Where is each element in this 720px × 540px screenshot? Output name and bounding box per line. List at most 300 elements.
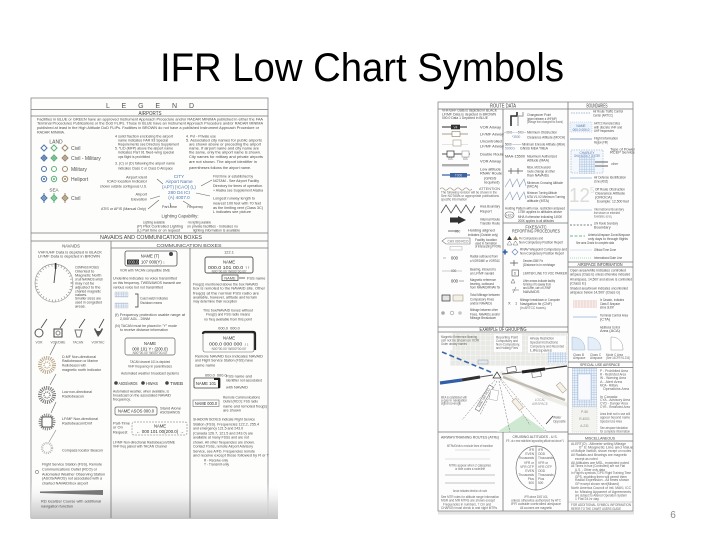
- airspace symbol: class shading: [573, 297, 629, 333]
- route symbol: uncontrolled airway: [442, 138, 504, 148]
- miscellaneous text: In Flight's symbols, GPS Flight Training Time: [571, 471, 631, 475]
- arrow: internal transfer route: [450, 216, 500, 226]
- panel: legend right page: [438, 102, 636, 511]
- panel: cruising altitudes: VFR OTP: [538, 465, 552, 469]
- icon: lifter arrows: [511, 278, 555, 294]
- airports intro text: published at least in the High Altitude DoD FLIPs. Facilities in BROWN do not have a published Instrument Approach Procedure or: [37, 125, 260, 130]
- heading: communication boxes: COMMUNICATION BOXES: [156, 243, 222, 248]
- route symbol: MEA: 5000 ——— Minimum Enroute Altitude (MEA): [505, 142, 566, 146]
- airport data block: 280 D4 ICI: [168, 190, 190, 195]
- route symbol: minimum turning altitude: [505, 190, 565, 203]
- airspace symbol: class shading: Additional Control: [600, 324, 620, 330]
- map: example of grouping: signal coverage: [441, 402, 461, 406]
- heading: position reporting procedures: [512, 224, 560, 234]
- special use airspace symbols and text: Special Use Area: [600, 420, 622, 424]
- heading: position reporting procedures: REPORTING PROCEDURES: [512, 228, 560, 234]
- communication box: remote communications outlet: name and remoted freq(s): [223, 404, 268, 408]
- note: underline indicates no voice: on this frequency. TWEB/AWOS transmit are: [113, 280, 181, 285]
- special use airspace symbols and text: R - Restricted Area: [600, 372, 626, 376]
- note: underline indicates no voice: various voice but not transmitted: [113, 284, 163, 290]
- note: frequency protection: (N) TACAN must be placed in "Y" mode: [115, 323, 177, 328]
- route symbol: radial outbound: 000: [451, 256, 459, 260]
- communication box: TACAN: VHF frequency in parentheses: [128, 364, 172, 368]
- airspace symbol: class shading: Terminal Control Area: [600, 312, 629, 318]
- map: example of grouping: a gap in navigation: [441, 398, 467, 402]
- airport data block: Part-time: [162, 204, 177, 209]
- heading: miscellaneous: MISCELLANEOUS: [585, 436, 615, 440]
- airspace symbol: class shading: Area (ACA): [600, 328, 621, 333]
- communication box: remote communications outlet: Remote Communications: [223, 394, 260, 400]
- miscellaneous text: to: Missing Apparent of Agreements: [575, 490, 631, 494]
- communication box: part-time or on request: NAME: [154, 424, 166, 428]
- route symbol: MAA: Altitude (MAA): [527, 158, 550, 162]
- boundary line symbols: Official Time Zone: [594, 247, 616, 252]
- off route obstruction clearance altitude: Off Route Obstruction: [595, 186, 625, 192]
- airport data block: NOTAM - See Airport Facility: [213, 178, 259, 183]
- note: shadow boxes: T - Transmit-only: [204, 462, 229, 466]
- icon: mileage breakdown: (in ARTCC boxes): [520, 306, 546, 310]
- compass roses note: charted magnetic: [75, 288, 101, 294]
- automated weather broadcast systems: ASOS/AWOS: [118, 381, 138, 386]
- airport notes column two: [186, 134, 263, 170]
- note: shadow boxes: and emergency 121.5 and 243.0: [193, 426, 244, 430]
- special use airspace symbols and text: In Canada:: [600, 395, 618, 399]
- communication box: part-time or on request: LF/MF Non-directional Radiobeacon/DME: [113, 440, 175, 444]
- miscellaneous text: U.S. - Other only data: [575, 468, 605, 472]
- heading: navaids and communication boxes: NAVAIDS AND COMMUNICATION BOXES: [100, 235, 203, 241]
- communication box: FSS not associated: identifier not associated: [226, 378, 262, 382]
- route symbol: zigzag area boundary: Report: [480, 208, 493, 214]
- route symbol: magnetic reference bearing: [451, 277, 500, 290]
- route symbol: RNAV route: T000: [455, 173, 462, 177]
- lighting capability: (L) Part time or on request: [137, 228, 181, 232]
- map: example of grouping: Compulsory and Recorded: [530, 344, 564, 348]
- compass roses note: Magnetic North: [75, 272, 101, 278]
- route symbol: holding pattern: 200K applies to all altitudes: [518, 218, 554, 223]
- airport data block: Longest runway length to: [213, 196, 255, 200]
- communication box: shadowed remote NAVAID: 000.0 000 000 ↓↓: [209, 342, 249, 346]
- route data color note: [442, 108, 497, 120]
- boundary line symbols: only days to through flights: [588, 236, 628, 241]
- map: example of grouping: AIRSPACE: [532, 402, 548, 406]
- map: example of grouping: cell not be shown on VOR: [441, 338, 480, 342]
- navaid data color note: LF/MF Data is depicted in BROWN: [38, 254, 100, 258]
- off route obstruction clearance altitude: Clearance Altitude: [595, 190, 625, 196]
- route symbol: total mileage boxes: Total Mileage between: [470, 292, 500, 297]
- panel: cruising altitudes: Plus: [538, 477, 545, 481]
- miscellaneous text: [568, 442, 633, 511]
- route symbol: MOCA: Clearance Altitude (MOCA): [527, 134, 566, 140]
- airport data block: First time or established by: [213, 174, 253, 178]
- map: example of grouping: Airway Restriction: [530, 336, 554, 340]
- panel: cruising altitudes: VFR or: [524, 461, 535, 465]
- compass roses note: used in congested: [75, 300, 102, 304]
- panel: airway training routes: Frequencies in numbers, 7 Cm and: [443, 502, 491, 506]
- boundary line symbols: Boundary: [594, 224, 611, 230]
- airport notes column two: are not shown. The airport identifier in: [189, 159, 257, 164]
- route symbol: changeover point: (given between a VHF/MF): [527, 116, 557, 121]
- route symbol: MAA: [505, 154, 557, 162]
- label: non-directional radiobeacon: Radiobeacon with: [62, 362, 86, 368]
- automated weather broadcast systems: broadcast on the associated NAVAID: [113, 392, 171, 398]
- airspace information text: airspace below 14,500' (Class G): [570, 290, 621, 294]
- special use airspace symbols and text: See airspace tabulation: [600, 426, 628, 430]
- airport notes column one: 4 solid fraction enclosing the airport: [115, 134, 174, 138]
- icon: lifter arrows: forming of to (away from: [523, 282, 551, 286]
- icon: compulsory position reports: Non-Compulsory Position Report: [519, 240, 564, 244]
- heading: position reporting procedures: FIXES/ATC: [525, 224, 547, 230]
- special use airspace symbols and text: A-231: [580, 424, 589, 428]
- icon: mileage breakdown: Mileage breakdown or Computer: [520, 297, 560, 302]
- special use airspace symbols and text: CYR - Restricted Area: [600, 405, 630, 409]
- map: example of grouping: Water: [553, 416, 562, 420]
- route symbol: total mileage boxes: [442, 292, 500, 306]
- route symbol: facility location pill: Facility location: [475, 237, 497, 242]
- compass roses note: may not be: [75, 280, 94, 286]
- special use airspace symbols and text: Operations Area: [603, 387, 629, 391]
- route symbol: RNAV route: RNAV Route: [480, 170, 502, 176]
- route symbol: uncontrolled airway: Uncontrolled: [480, 138, 502, 144]
- communication box: TACAN: N00°00.00' W000°00.00': [133, 351, 168, 355]
- route symbol: minimum crossing altitude: (MCA): [527, 184, 539, 188]
- airport data block: shown outside contiguous U.S.: [100, 184, 147, 188]
- boundary line symbols: See area Charts for complete data: [576, 240, 615, 245]
- communication box: TACAN: NAME: [144, 341, 156, 346]
- airport symbol list: SEA: [49, 188, 60, 192]
- airspace symbol: quarter-round class shapes: Airspace: [573, 356, 586, 360]
- icon: mileage breakdown: 1: [515, 300, 517, 306]
- airspace symbol: quarter-round class shapes: [572, 337, 630, 360]
- airport notes column one: [115, 134, 180, 170]
- boundary symbols: Region (FIR): [594, 140, 608, 144]
- airspace information text: Shaded area/brown indicates uncontrolled: [570, 286, 628, 290]
- label: non-directional radiobeacon: magnetic north indicator: [62, 367, 102, 372]
- special use airspace symbols and text: R-4001: [579, 417, 590, 421]
- compass roses note: areas.: [75, 304, 86, 308]
- special use airspace symbols and text: MOA - Military: [600, 384, 618, 388]
- label: LF/MF radiobeacon: Radiobeacon/Dmf: [62, 420, 93, 426]
- miscellaneous text: 1 Flat 24-hr day: [575, 497, 599, 501]
- note: shadow boxes: Contact FSSs, remote Airport Advisory: [193, 444, 253, 448]
- route symbol: facility location pill: used in formation: [475, 240, 497, 246]
- icon: coast watch boxes: Coast watch indicates: [140, 296, 168, 300]
- route symbol: MOCA: Minimum Obstruction: [527, 130, 557, 134]
- boundary symbols: other: [611, 162, 619, 166]
- route symbol: magnetic reference bearing: bearing, outbound: [470, 281, 494, 286]
- icon: lifter arrows: NAVAIDS: [523, 289, 540, 294]
- special use airspace symbols and text: [572, 368, 630, 434]
- icon: limiter line: LIMITER LINE TO VOC PARKER: [523, 270, 567, 276]
- panel: cruising altitudes: All courses are magnetic: [520, 506, 552, 510]
- route symbol: off-route note: specific information: [441, 198, 467, 202]
- navaid data color note: VHF/UHF Data is depicted in BLACK: [38, 250, 102, 254]
- icon row: VOR symbols: VOR: [36, 340, 43, 344]
- route symbol: MEA: GNSS MEA *MEA: [520, 146, 548, 150]
- icon: compass locator beacon: [42, 430, 56, 453]
- arrow: internal transfer route: Transfer Route: [480, 220, 500, 226]
- route symbol: facility location pill: of intersecting PVORs: [475, 244, 501, 248]
- airport notes column two: 5. Associated city names for public airports: [186, 138, 262, 142]
- airport symbol list: Civil: [71, 146, 80, 152]
- airport data block: [100, 174, 264, 214]
- miscellaneous text: of Multiple Varition, shown except on routes: [571, 449, 631, 453]
- airports intro text: Facilities in BLUE or GREEN have an approved Instrument Approach Procedure and/or RADAR MINIMA published in either the FAA: [37, 116, 263, 122]
- communication box: NAME with FSS name: N00°00.00' W000°00.00': [212, 269, 247, 273]
- airport data block: Airport Name: [165, 179, 193, 184]
- airport symbol list: Military: [71, 167, 87, 173]
- route symbol: RNAV route: [442, 166, 502, 184]
- communication box: TACAN: 000 101 Y↑ (200.0): [132, 346, 168, 352]
- airspace symbol: class shading: above 18,000': [600, 304, 614, 310]
- icon: DME fix: Denotes DME Fix: [523, 258, 543, 263]
- boundary line symbols: line shown on extended: [594, 211, 620, 215]
- communication box: remote communications outlet: [193, 394, 268, 412]
- communication box: VOR with TACAN: NAME (T): [141, 254, 160, 258]
- map: example of grouping: Special Instructions: [530, 340, 558, 344]
- route symbol: minimum crossing altitude: Minimum Crossing Altitude: [527, 180, 563, 185]
- label: low non-directional: Radiobeacon: [62, 394, 84, 398]
- miscellaneous text: All Altitudes are MSL, excepted noted: [571, 461, 629, 465]
- special use airspace symbols and text: appear beyond name: [600, 416, 630, 420]
- off route obstruction clearance altitude: (OROCA): [595, 194, 613, 200]
- heading: airports: AIRPORTS: [138, 111, 162, 117]
- boundary symbols: CHARLEY: [579, 151, 595, 155]
- flight service station note: [35, 462, 105, 486]
- boundary symbols: with discrete VHF and: [594, 124, 622, 130]
- route symbol: changeover point: [511, 112, 563, 126]
- icon: RNAV waypoint: RNAV Waypoint Compulsory and: [520, 246, 567, 252]
- map: example of grouping: Lifespans: [530, 348, 553, 352]
- boundary symbols: Flight Information: [594, 136, 618, 140]
- airspace information text: [570, 268, 632, 294]
- off route obstruction clearance altitude: [569, 185, 630, 207]
- route symbol: magnetic reference bearing: Magnetic reference: [470, 277, 496, 282]
- boundary line symbols: International Date Line: [594, 255, 622, 260]
- panel: airway training routes: [441, 434, 500, 510]
- page number: 6: [670, 510, 676, 521]
- note: shadow boxes: (Canada 126.7, 121.5 and 243.0) are: [193, 430, 253, 436]
- panel: cruising altitudes: VFR above 3000' AGL: [524, 495, 548, 499]
- boundary symbols: Air Defense Identification: [594, 174, 626, 180]
- panel: cruising altitudes: ODD: [538, 469, 546, 473]
- off route obstruction clearance altitude: Example: 12,500 feet: [597, 198, 630, 204]
- panel: cruising altitudes: Thousands: [538, 456, 554, 460]
- communication box: VOR with TACAN: [120, 251, 177, 272]
- route symbol: bearing inbound: 000: [451, 269, 457, 273]
- boundary symbols: RCEP Service: [610, 150, 635, 154]
- boundary line symbols: International Boundary: [594, 208, 624, 212]
- boundary symbols: UHF frequencies: [594, 128, 614, 133]
- route symbol: RNAV route: required): [484, 180, 500, 184]
- boundary symbols: Type of Power: [610, 146, 636, 152]
- compass roses note: adjusted to the: [75, 284, 101, 290]
- flight service station note: Communications Outlet (RCO) or: [42, 466, 98, 472]
- airport data block: (A) 4007.0: [168, 195, 190, 200]
- automated weather broadcast systems: HWAS: [146, 381, 158, 386]
- route data color note: VHF/UHF Data is depicted in BLACK: [442, 108, 497, 112]
- heading: route data: ROUTE DATA: [490, 104, 517, 110]
- airspace symbol: quarter-round class shapes: (See 14CFR 91.215): [606, 356, 630, 360]
- automated weather broadcast systems: TWEB: [170, 381, 183, 386]
- communication box: part-time or on request: [113, 420, 187, 448]
- route symbol: bearing inbound: Bearing, inbound to: [470, 266, 496, 272]
- communication box: stand alone ASOS: [115, 406, 181, 415]
- boundary symbols: NAME: [576, 124, 586, 128]
- map: example of grouping: LOCAL: [535, 398, 545, 402]
- boundary symbols: Air Route Traffic Control: [593, 108, 623, 114]
- route symbol: radial outbound: a VOR/DME or VORTAC: [470, 258, 500, 263]
- panel: cruising altitudes: VFR or: [538, 461, 549, 465]
- compass roses note: Oriented to: [75, 268, 94, 274]
- route symbol: MEA and MOCA change: route change at other: [527, 168, 556, 174]
- note: frequencies mentioned: may determine their reception: [193, 298, 237, 304]
- note: shadow boxes: Service, see A/FD. Frequencies remote: [193, 448, 255, 454]
- special use airspace symbols and text: CYA - Advisory Area: [600, 398, 630, 402]
- communication box: remote communications outlet: NAME 000.0: [195, 401, 218, 406]
- label: LF/MF radiobeacon: LF/MF Non-directional: [62, 416, 98, 421]
- airport notes column two: name. If airport name and city name are: [189, 146, 259, 150]
- route symbol: VOR airway: VOR Airway: [480, 124, 501, 130]
- route symbol: double route: [442, 151, 504, 166]
- airport notes column one: indicates Class C or Class D Airspace: [118, 166, 173, 170]
- route symbol: LF/MF airway: [442, 132, 504, 136]
- route symbol: radial outbound: [443, 254, 500, 263]
- miscellaneous text: GPS, enabling them will permit them: [575, 475, 627, 479]
- boundary line symbols: boundaries, as req.: [594, 214, 612, 218]
- note: shadow boxes: shown. All other frequencies are shown.: [193, 440, 255, 444]
- panel: cruising altitudes: EVEN: [525, 469, 535, 473]
- airport notes column one: name indicates FAR 93 Special: [118, 138, 168, 142]
- map: example of grouping: and Holding Fixes: [496, 346, 518, 350]
- route symbol: facility location pill: CHX 000 RCO: [448, 239, 469, 243]
- communication box: remote communications outlet: are shown: [223, 408, 241, 412]
- panel: cruising altitudes: IFR: [538, 448, 544, 452]
- route symbol: mileage breakdown circles: Fixes, NAVAIDs and/or: [470, 312, 501, 316]
- panel: airway training routes: AIRWAY/TRAINING ROUTES (ATRs): [441, 434, 500, 440]
- panel: cruising altitudes: 500: [529, 481, 534, 485]
- route symbol: off-route note: See NOTAMs or appropriate publications: [441, 194, 499, 198]
- label: non-directional radiobeacon: D-MF Non-directional: [62, 354, 96, 359]
- communication box: part-time or on request: ← 000 101 00(200.0) →: [136, 429, 184, 434]
- communication box: NAME with FSS name: NAME: [224, 275, 236, 280]
- panel: airway training routes: MTRs appear when 2 categories: [449, 464, 491, 468]
- note: shadow boxes: R - Receive-only: [204, 458, 228, 462]
- automated weather broadcast systems: [113, 370, 183, 402]
- miscellaneous text: REFER TO THE CHART USERS GUIDE: [571, 507, 621, 511]
- route symbol: MEA: 5000G: [505, 146, 515, 150]
- flight service station note: charted NAVAID/box airport: [42, 480, 89, 486]
- note: shadow boxes: and receive except those followed by R or T: [193, 452, 270, 458]
- special use airspace symbols and text: A - Alert Area: [600, 380, 622, 384]
- airspace symbol: quarter-round class shapes: Class B: [573, 353, 584, 357]
- note: frequencies mentioned: This box/NAVAID boxes without: [203, 308, 254, 312]
- note: shadow boxes: SHADOW BOXES indicate Flight Service: [193, 416, 255, 422]
- airport notes column one: 3. (C) or (D) following the airport name: [115, 160, 175, 166]
- note: shadow boxes: Station (FSS). Frequencies 122.2, 255.4: [193, 422, 260, 426]
- miscellaneous text: are subject to Altered Operation System: [575, 494, 627, 498]
- note: frequencies mentioned: Freq(s) and FSS radio means: [206, 312, 250, 316]
- route symbol: VOR airway: [442, 124, 501, 130]
- communication box: stand alone ASOS: ASOS/AWOS: [160, 410, 180, 414]
- airspace symbol: quarter-round class shapes: Airspace: [590, 356, 603, 360]
- route symbol: MAA: MAA-15500: [505, 154, 526, 158]
- heading: legend: L E G E N D: [106, 103, 194, 110]
- airport notes column one: ops flight is prohibited: [118, 154, 150, 159]
- route symbol: radial outbound: Radial outbound from: [470, 254, 498, 258]
- airport symbol list: [41, 140, 101, 203]
- route symbol: total mileage boxes: Compulsory Fixes: [470, 296, 494, 302]
- flight service station note: Automated Weather Observing Station: [42, 472, 105, 476]
- airport data block: Airport ident: [126, 174, 148, 180]
- automated weather broadcast systems: frequency.: [113, 396, 131, 402]
- special use airspace symbols and text: for complete information: [600, 430, 630, 434]
- arrow: internal transfer route: Internal Route: [480, 216, 500, 222]
- panel: airway training routes: MTRs/Grids to exclude lines of transition: [447, 444, 493, 448]
- route symbol: total mileage boxes: and/or NAVAIDs: [470, 300, 492, 306]
- map: example of grouping: V000 100 RCO: [477, 387, 491, 408]
- panel: cruising altitudes: IFR - at or near established approaching altitude and above FL: [506, 439, 564, 443]
- note: frequencies mentioned: no freq available from this point: [204, 316, 253, 322]
- route symbol: MEA and MOCA change: than NAVAIDs: [527, 172, 549, 178]
- lighting capability: [137, 214, 240, 232]
- route symbol: MAA: Maximum Authorized: [527, 154, 557, 158]
- icon row: VOR symbols: [35, 319, 105, 344]
- communication box: shadowed remote NAVAID: 000.0 000.0: [218, 326, 241, 330]
- label: compass locator: Compass locator Beacon: [62, 448, 103, 452]
- panel: cruising altitudes: ODD: [538, 452, 546, 456]
- automated weather broadcast systems: Automated weather broadcast systems: [121, 370, 179, 376]
- airport data block: ICAO location Indicator: [107, 178, 148, 184]
- compass roses note: of all NAVAIDS which: [75, 276, 103, 282]
- lighting capability: Lighting available: [143, 220, 165, 224]
- communication box: shadowed remote NAVAID: N00°00.00' W000°00.00': [212, 347, 247, 351]
- airport notes column two: City names for military and private airports: [189, 154, 263, 159]
- route symbol: RNAV route: Low altitude: [480, 166, 501, 172]
- airport notes column two: 4. Pvt - Private use: [186, 134, 216, 138]
- icon: localizer course: navigation function: [41, 504, 73, 508]
- miscellaneous text: except as noted: [575, 457, 598, 461]
- note: frequencies mentioned: Freq(s) mentioned above the box NAVAID: [193, 282, 258, 286]
- lighting capability: Lighting Capability:: [161, 214, 199, 218]
- communication box: part-time or on request: Part-Time: [113, 420, 130, 426]
- miscellaneous text: All Radials and Bearings are magnetic: [571, 453, 627, 457]
- communication box: FSS not associated: [194, 372, 262, 390]
- boundary line symbols: [570, 208, 630, 260]
- lighting capability: on private facilities - Indicates no: [187, 224, 238, 228]
- route symbol: magnetic reference bearing: 000: [451, 278, 459, 284]
- airport data block: ATIS or AFIS (Manual Only): [101, 206, 147, 211]
- airport data block: Airport: [136, 192, 148, 196]
- note: frequency protection: [115, 312, 186, 332]
- communication box: remote communications outlet: Outlet (RCO): FSS radio: [223, 398, 258, 404]
- communication box: part-time or on request: or On: [113, 424, 123, 430]
- route symbol: holding pattern: HLD: [506, 214, 513, 218]
- route symbol: MEA and MOCA change: MEA, MOCA and/or: [527, 164, 551, 170]
- map: example of grouping: Magnetic Reference Bearing: [441, 335, 477, 339]
- airspace symbol: quarter-round class shapes: Class C: [590, 353, 602, 357]
- icon: compulsory position reports: Fix Compulsory and: [519, 236, 543, 240]
- communication box: TACAN: TACAN channel 101 is depicted: [130, 359, 170, 364]
- route symbol: holding pattern: [505, 206, 565, 223]
- airport data block: (APT) [ICAO] (L): [162, 184, 196, 190]
- note: shadow boxes: available at many FSSs and are not: [193, 434, 250, 440]
- route symbol: MOCA: [504, 130, 566, 140]
- route symbol: double route: Double Route: [480, 152, 504, 156]
- navaid data color note: [38, 250, 102, 258]
- communication box: FSS not associated: 000.0 000.0: [205, 372, 227, 378]
- communication box: VOR with TACAN: 107 000(Y) ↓: [141, 260, 165, 264]
- route symbol: changeover point: Changeover Point: [527, 112, 552, 117]
